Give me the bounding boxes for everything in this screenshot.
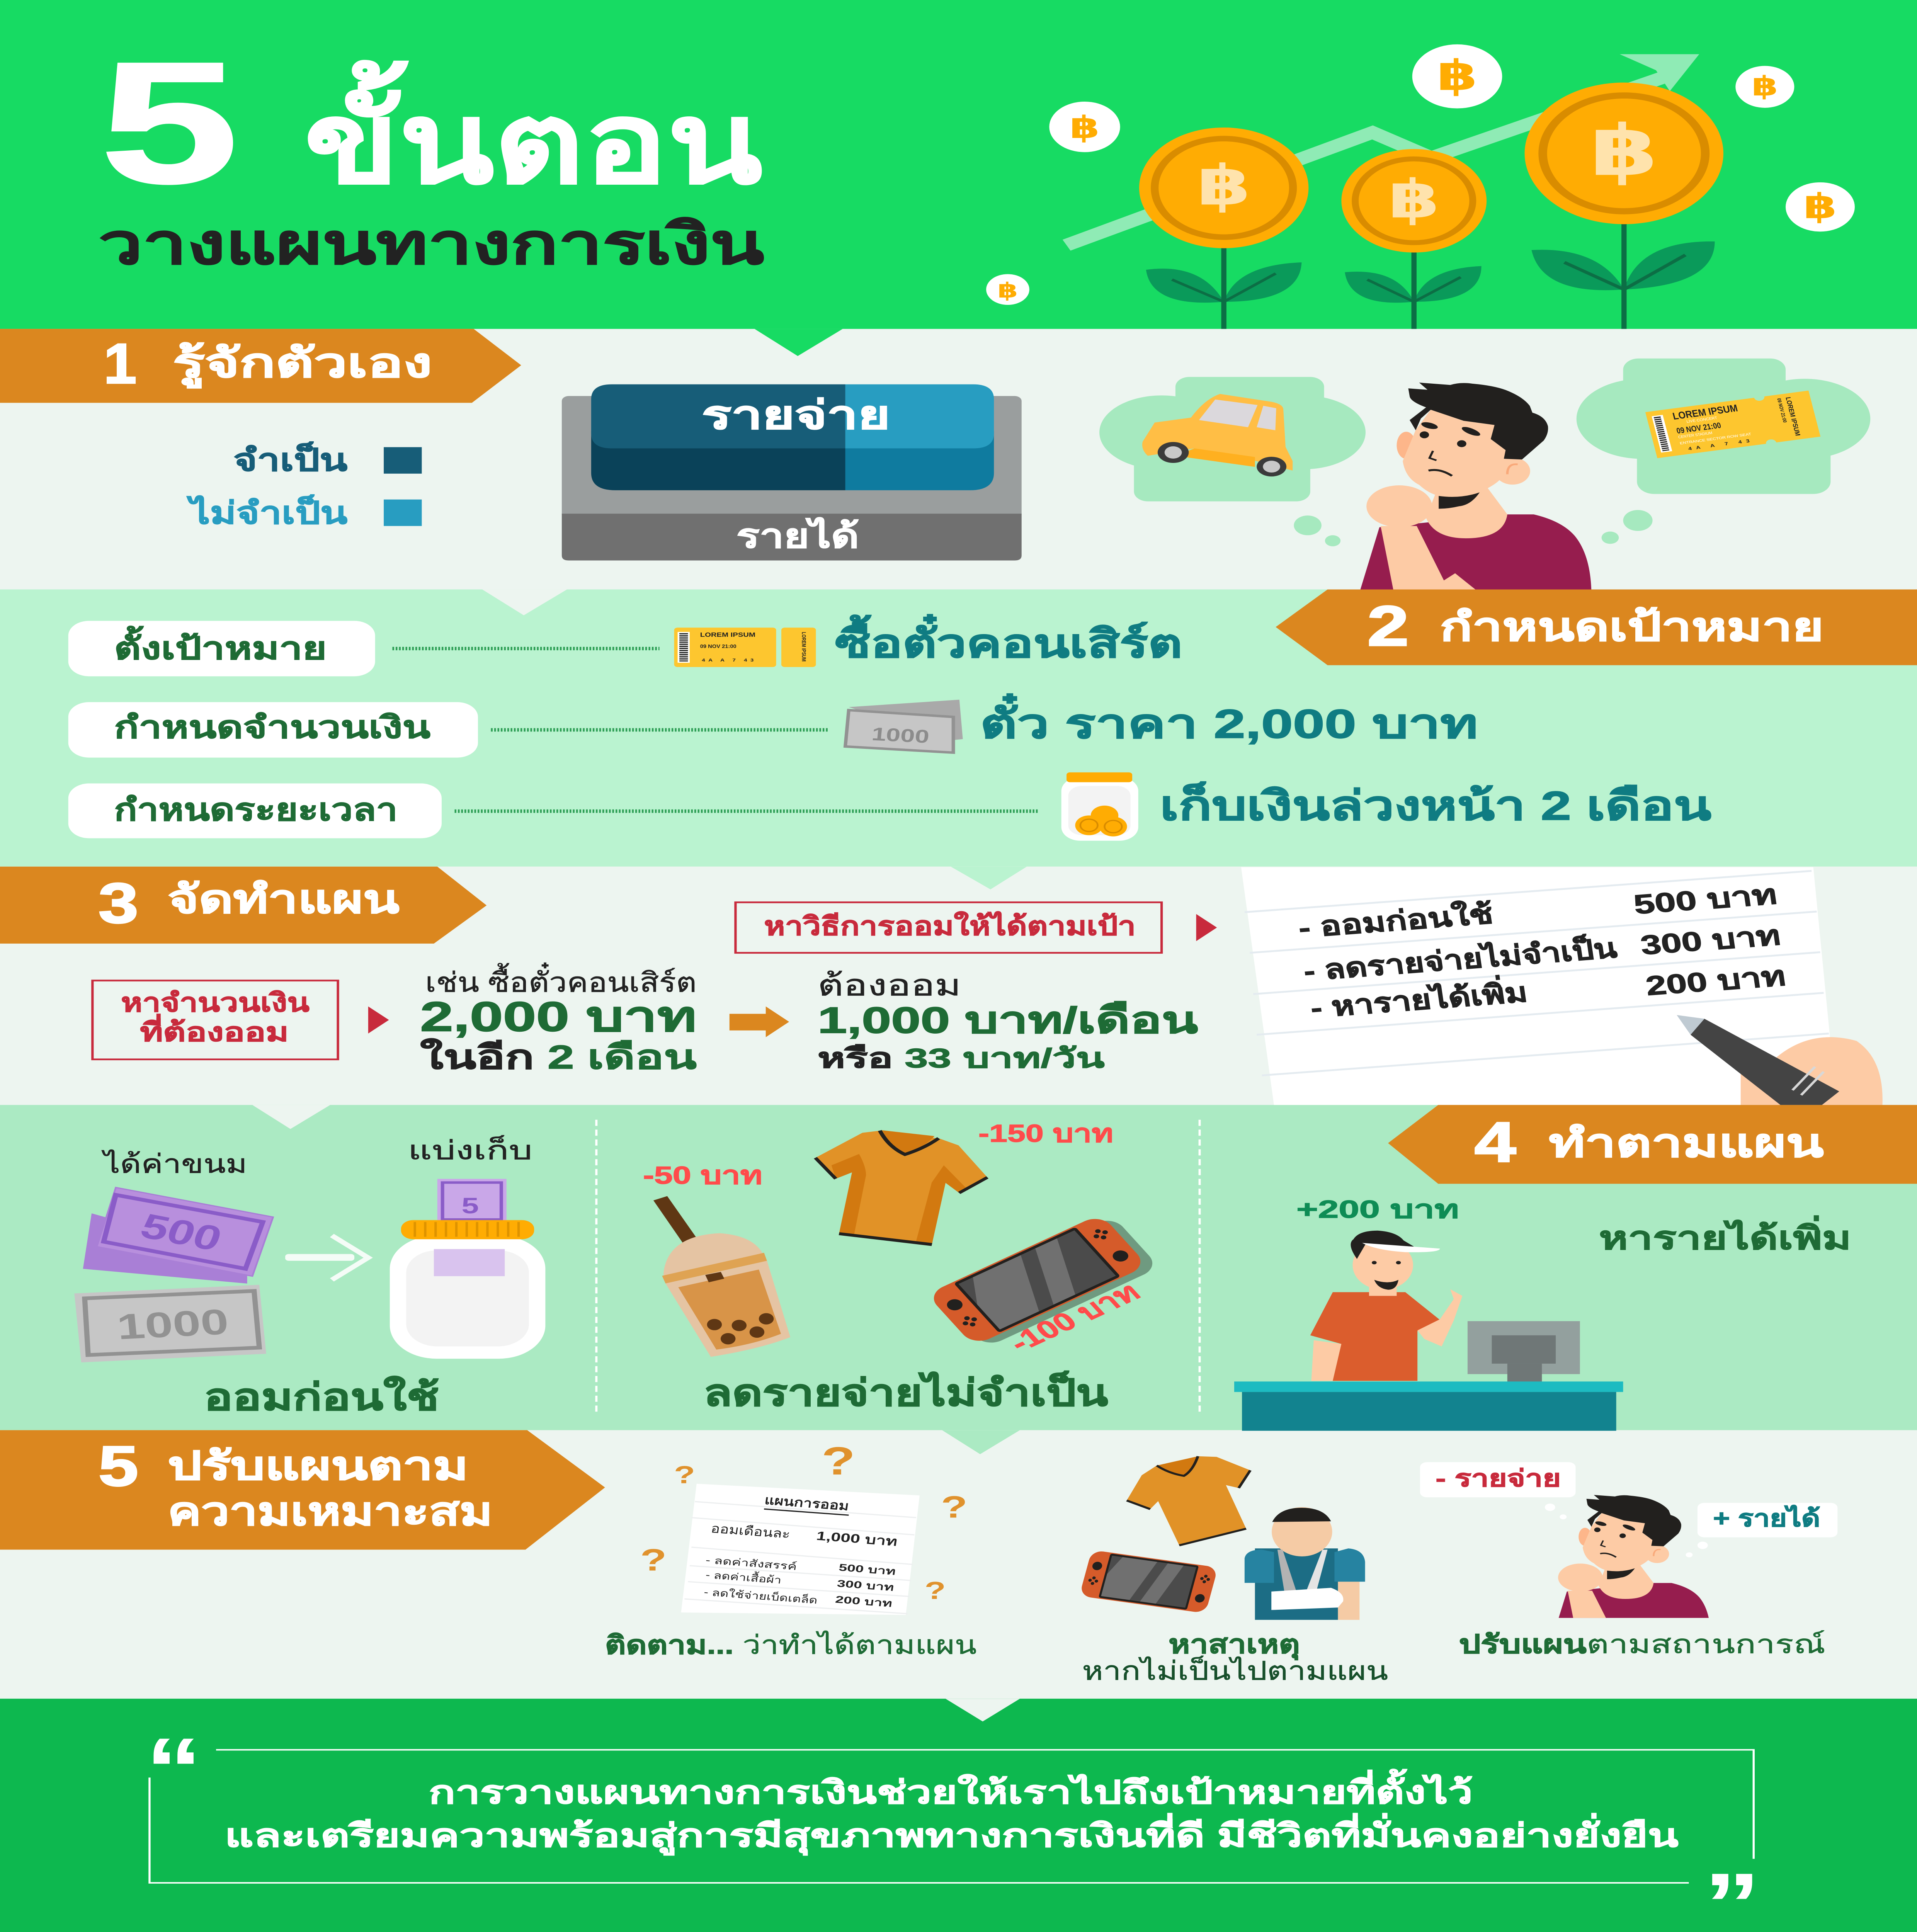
icon: car <box>1142 394 1293 476</box>
plant coin 3: ฿ <box>1590 112 1658 190</box>
closing statement <box>225 1769 1679 1855</box>
pointer from panel 3 <box>252 1105 330 1129</box>
row: set the time: เก็บเงินล่วงหน้า 2 เดือน <box>1160 781 1711 829</box>
small coins: ฿ <box>998 279 1018 302</box>
caption: adjust: ปรับแผนตามสถานการณ์ <box>1459 1630 1825 1659</box>
pointer from panel 5 <box>946 1699 1020 1721</box>
savings plan document: 1,000 บาท <box>815 1529 898 1549</box>
legend: ไม่จำเป็น <box>187 494 347 530</box>
plant coin 2 <box>1341 149 1487 329</box>
thinking man small <box>1554 1495 1711 1633</box>
icon: ticket: LIVE CONCERT <box>1686 416 1718 424</box>
icon: ticket: LOREM IPSUM <box>700 631 755 638</box>
row: set the amount <box>68 694 1478 758</box>
thought dots small <box>1545 1503 1708 1557</box>
icon: banknotes: 1000 <box>115 1301 230 1347</box>
banner 2: กำหนดเป้าหมาย <box>1440 605 1823 649</box>
example goal text: 2,000 บาท <box>420 993 697 1040</box>
banner 2 <box>1276 589 1917 665</box>
icon: ticket: 09 NOV 21:00 <box>700 644 737 649</box>
savings needed text: ต้องออม <box>818 969 961 1002</box>
column: cut unnecessary spending: -150 บาท <box>978 1120 1113 1147</box>
example goal text: ในอีก 2 เดือน <box>420 1038 697 1076</box>
row: set a goal <box>68 614 1182 676</box>
column: cut unnecessary spending: -100 บาท <box>1003 1278 1146 1357</box>
label: minus expense: - รายจ่าย <box>1436 1465 1561 1491</box>
icon: ticket: 09 NOV 21:00 <box>1675 421 1722 435</box>
icon: monitor <box>1468 1321 1580 1382</box>
banner 3: จัดทำแผน <box>168 877 399 921</box>
icon: ticket: LOREM IPSUM <box>1671 402 1739 422</box>
question marks: ? <box>925 1577 946 1604</box>
question marks <box>640 1439 967 1604</box>
banner 5: ความเหมาะสม <box>168 1490 493 1534</box>
icon: coin jar <box>1061 772 1138 841</box>
panel 4: follow the plan <box>74 1105 1917 1431</box>
banner 1: 1 <box>104 332 136 395</box>
icon: ticket: 4A A 7 43 <box>702 658 754 662</box>
banner 5 <box>0 1430 605 1549</box>
icon: ticket: CENTER STADIUM <box>1678 431 1713 439</box>
column: cut unnecessary spending: -50 บาท <box>643 1162 762 1189</box>
icon: injured person <box>1245 1507 1365 1620</box>
panel 3: make a plan <box>0 867 1883 1105</box>
row: set the amount: ตั๋ว ราคา 2,000 บาท <box>980 694 1478 747</box>
income and expense stack chart: รายจ่าย <box>702 393 890 437</box>
icon: game console small <box>1079 1550 1218 1613</box>
icon: ticket: 09 NOV 21:00 <box>1776 398 1788 423</box>
white arrow <box>285 1236 368 1280</box>
caption: find the cause: หาสาเหตุ <box>1169 1630 1300 1660</box>
callout: how to save: หาวิธีการออมให้ได้ตามเป้า <box>764 911 1136 940</box>
banner 1 <box>0 329 521 403</box>
label: plus income: + รายได้ <box>1713 1504 1820 1531</box>
row: set the time <box>68 772 1711 841</box>
thought cloud with car <box>1099 377 1366 546</box>
quote frame <box>150 1750 1754 1883</box>
question marks: ? <box>674 1461 695 1488</box>
callout: find amount <box>92 981 338 1060</box>
note paper with pen <box>1241 867 1883 1105</box>
savings plan document: แผนการออม <box>764 1493 850 1513</box>
icon: jar with note: 5 <box>461 1193 479 1218</box>
icon: banknote: 1000 <box>871 724 930 747</box>
savings plan document <box>681 1484 920 1615</box>
savings plan document: - ลดใช้จ่ายเบ็ดเตล็ด <box>703 1586 818 1606</box>
caption: find the cause: หากไม่เป็นไปตามแผน <box>1082 1655 1388 1685</box>
small coins: ฿ <box>1437 52 1478 99</box>
icon: ticket: LOREM IPSUM <box>801 632 807 662</box>
opening quote mark: “ <box>145 1720 202 1819</box>
banner 1: รู้จักตัวเอง <box>173 340 432 388</box>
banner 5: 5 <box>99 1434 138 1498</box>
banner 4: 4 <box>1475 1110 1516 1173</box>
plant coin 2: ฿ <box>1388 170 1440 229</box>
column: save first: แบ่งเก็บ <box>408 1135 532 1165</box>
savings plan document: 300 บาท <box>836 1578 895 1593</box>
label: plus income <box>1698 1503 1837 1537</box>
orange arrow <box>730 1007 789 1037</box>
icon: desk <box>1234 1381 1623 1431</box>
column: earn more <box>1234 1196 1851 1431</box>
savings needed text: หรือ 33 บาท/วัน <box>818 1043 1105 1073</box>
savings plan document: - ลดค่าสังสรรค์ <box>705 1554 798 1572</box>
income and expense stack chart <box>562 384 1022 561</box>
icon: worker <box>1310 1231 1462 1381</box>
icon: ticket <box>1645 387 1822 462</box>
title: five steps: ขั้นตอน <box>304 60 763 206</box>
icon: banknotes <box>74 1187 273 1362</box>
savings plan document: 200 บาท <box>835 1594 893 1609</box>
legend <box>187 441 422 530</box>
column: cut unnecessary spending: ลดรายจ่ายไม่จำเป็น <box>704 1370 1108 1413</box>
list of savings <box>1296 879 1788 1024</box>
row: set a goal: ซื้อตั๋วคอนเสิร์ต <box>835 614 1182 666</box>
banner 5: ปรับแผนตาม <box>168 1444 468 1488</box>
banner 3: 3 <box>99 871 138 935</box>
panel 5: adjust plan <box>0 1430 1837 1685</box>
banner 4 <box>1388 1105 1917 1184</box>
banner 4: ทำตามแผน <box>1549 1121 1823 1165</box>
icon: hand and pen <box>1677 1015 1883 1105</box>
icon: banknote <box>845 700 963 753</box>
title number 5: 5 <box>100 27 238 219</box>
small coins <box>986 44 1855 305</box>
icon: shirt small <box>1127 1456 1250 1545</box>
thinking man <box>1361 383 1591 589</box>
small coins: ฿ <box>1752 71 1778 102</box>
row: set the amount: กำหนดจำนวนเงิน <box>114 710 430 745</box>
thought cloud with ticket <box>1577 359 1870 544</box>
pointer from panel 4 <box>942 1430 1020 1454</box>
question marks: ? <box>640 1543 667 1577</box>
label: minus expense <box>1420 1462 1576 1497</box>
list of savings: - ลดรายจ่ายไม่จำเป็น <box>1301 932 1619 986</box>
icon: bubble tea <box>653 1196 790 1357</box>
savings needed text: 1,000 บาท/เดือน <box>818 1000 1198 1041</box>
income and expense stack chart: รายได้ <box>737 517 859 555</box>
column: save first: ออมก่อนใช้ <box>204 1376 439 1418</box>
icon: jar with note <box>390 1179 545 1359</box>
pointer from panel 1 <box>482 589 567 615</box>
savings needed text <box>818 969 1198 1073</box>
closing statement: และเตรียมความพร้อมสู่การมีสุขภาพทางการเงินที่ดี มีชีวิตที่มั่นคงอย่างยั่งยืน <box>225 1813 1679 1855</box>
icon: ticket: ENTRANCE SECTOR ROW SEAT <box>1679 432 1752 446</box>
savings plan document: ออมเดือนละ <box>710 1522 791 1541</box>
column: cut unnecessary spending <box>643 1120 1160 1413</box>
callout: find amount: ที่ต้องออม <box>140 1014 289 1047</box>
list of savings: - ออมก่อนใช้ <box>1296 898 1495 944</box>
callout: find amount: หาจำนวนเงิน <box>121 988 310 1017</box>
callout: how to save <box>735 902 1162 953</box>
red arrow <box>368 1007 389 1034</box>
dashed dividers <box>596 1120 1200 1412</box>
example goal text <box>420 963 697 1076</box>
banner 3 <box>0 867 486 944</box>
savings plan document: 500 บาท <box>838 1562 896 1577</box>
icon: game console <box>927 1211 1160 1351</box>
example goal text: เช่น ซื้อตั๋วคอนเสิร์ต <box>425 963 697 998</box>
savings plan document: - ลดค่าเสื้อผ้า <box>705 1568 782 1586</box>
row: set the time: กำหนดระยะเวลา <box>114 793 398 827</box>
column: earn more: หารายได้เพิ่ม <box>1599 1216 1851 1256</box>
rising arrow <box>1067 54 1699 245</box>
question marks: ? <box>941 1490 967 1524</box>
plant coin 3 <box>1525 83 1723 329</box>
row: set a goal: ตั้งเป้าหมาย <box>114 626 327 666</box>
pointer from panel 2 <box>951 867 1027 889</box>
legend: จำเป็น <box>233 441 347 477</box>
icon: ticket: 4A A 7 43 <box>1687 438 1750 451</box>
caption: track: ติดตาม... ว่าทำได้ตามแผน <box>605 1631 976 1660</box>
footer quote panel <box>145 1699 1761 1918</box>
icon: shirt <box>815 1130 987 1245</box>
icon: ticket <box>674 628 816 667</box>
small coins: ฿ <box>1070 110 1100 145</box>
small coins: ฿ <box>1803 187 1837 226</box>
list of savings: 500 บาท <box>1632 879 1779 920</box>
subtitle: financial planning: วางแผนทางการเงิน <box>99 212 764 276</box>
header panel <box>99 27 1855 329</box>
list of savings: 300 บาท <box>1639 920 1782 961</box>
pointer under header <box>755 329 843 356</box>
plant coin 1 <box>1139 128 1308 329</box>
icon: ticket: LOREM IPSUM <box>1784 396 1801 436</box>
panel 1: know yourself <box>0 329 1870 589</box>
icon: banknotes: 500 <box>135 1207 227 1259</box>
column: save first <box>74 1135 545 1418</box>
closing quote mark: “ <box>1704 1819 1761 1918</box>
caption: find the cause <box>1082 1630 1388 1685</box>
list of savings: - หารายได้เพิ่ม <box>1308 973 1529 1024</box>
column: save first: ได้ค่าขนม <box>101 1150 247 1179</box>
list of savings: 200 บาท <box>1644 961 1788 1001</box>
banner 2: 2 <box>1367 594 1409 658</box>
column: earn more: +200 บาท <box>1296 1196 1459 1223</box>
panel 2: set goals <box>68 589 1917 841</box>
plant coin 1: ฿ <box>1197 155 1251 216</box>
red arrow <box>1196 914 1217 941</box>
question marks: ? <box>822 1439 855 1483</box>
closing statement: การวางแผนทางการเงินช่วยให้เราไปถึงเป้าหมายที่ตั้งไว้ <box>429 1769 1473 1810</box>
